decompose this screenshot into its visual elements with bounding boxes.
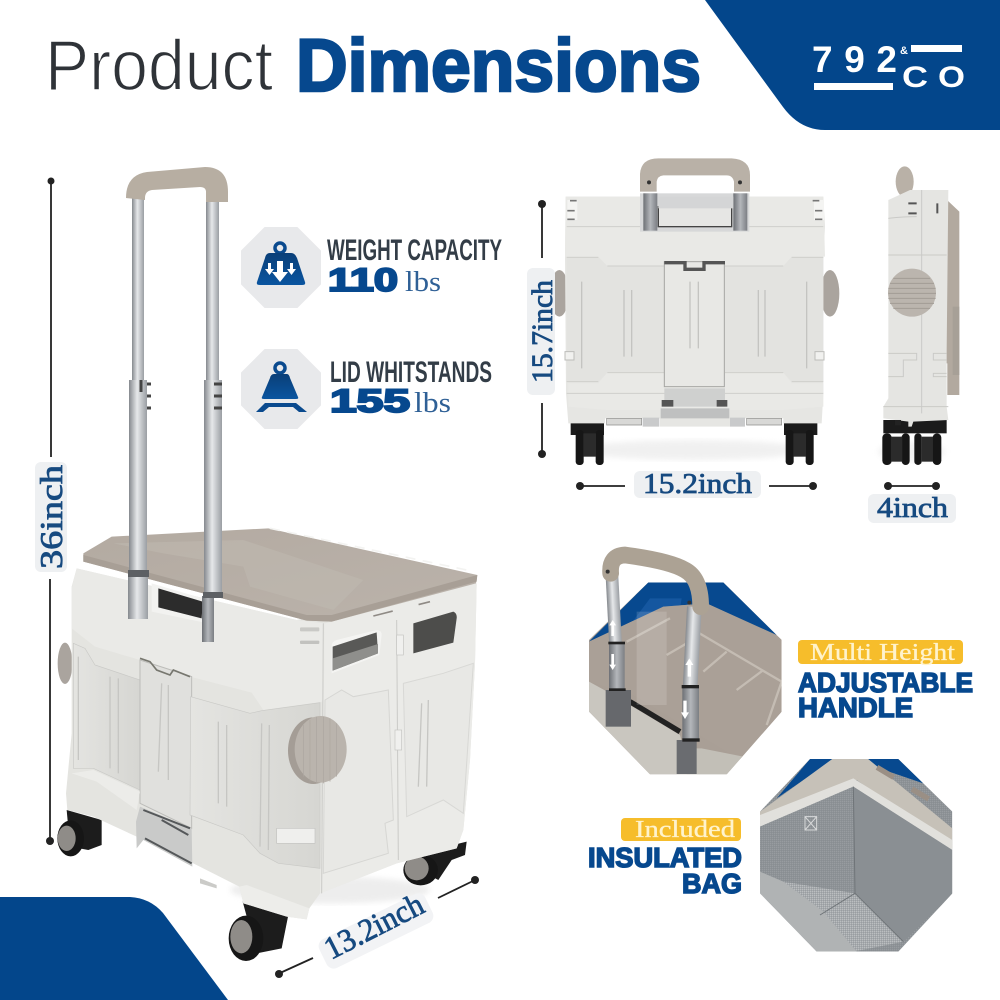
- logo: 792 & co: 792: [812, 39, 897, 80]
- callout: adjustable handle: [798, 640, 973, 723]
- bottom tray: [664, 388, 725, 407]
- handle recess: [640, 193, 749, 232]
- dimension: height 36 inch: 36inch: [33, 465, 69, 569]
- center panel: [664, 262, 724, 387]
- text: weight capacity 110 lbs: WEIGHT CAPACITY: [327, 234, 502, 267]
- bottom tray: [136, 807, 192, 867]
- body: [565, 197, 825, 427]
- handle grip: [611, 555, 701, 607]
- wheels: [571, 422, 604, 435]
- lid plate: [940, 193, 959, 395]
- panel ridges: [78, 657, 428, 850]
- side body: [883, 190, 948, 427]
- photo: insulated bag interior: [760, 753, 952, 952]
- top notches: [567, 200, 824, 220]
- callout: adjustable handle: HANDLE: [798, 692, 913, 723]
- dimension: width 15.2 inch: [576, 469, 817, 500]
- callout: insulated bag: BAG: [682, 868, 742, 899]
- lid: [83, 528, 477, 622]
- dimension: height 15.7 inch: 15.7inch: [526, 280, 559, 383]
- text: weight capacity 110 lbs: [327, 234, 502, 298]
- corner banner: top right: [705, 0, 1000, 130]
- photo: adjustable handle close-up: [589, 555, 782, 774]
- text: lid withstands 155 lbs: lbs: [414, 387, 451, 419]
- callout: insulated bag: Included: [635, 817, 735, 843]
- handle end: [896, 166, 914, 197]
- front view of cart: [550, 158, 839, 465]
- main cart with telescopic handle: [57, 167, 477, 961]
- clips: [140, 658, 190, 677]
- logo: 792 & co: &: [900, 45, 908, 57]
- logo: 792 & co: [812, 39, 965, 94]
- dimension: depth 4 inch: 4inch: [877, 492, 949, 524]
- dimension: depth 13.2 inch: 13.2inch: [318, 886, 430, 966]
- callout: adjustable handle: ADJUSTABLE: [798, 667, 973, 698]
- text: lid withstands 155 lbs: [330, 356, 492, 419]
- dimension: height 15.7 inch: [526, 200, 559, 458]
- telescopic handle: [126, 167, 228, 642]
- icon: weight capacity: [242, 228, 320, 307]
- handle grip: [640, 158, 750, 192]
- upper band: [72, 568, 325, 710]
- logo: 792 & co: C: [902, 61, 928, 94]
- side knob: [888, 269, 936, 317]
- logo: 792 & co: O: [938, 61, 965, 94]
- dimension: depth 13.2 inch: [275, 876, 479, 978]
- text: weight capacity 110 lbs: 110: [328, 262, 398, 298]
- text: lid withstands 155 lbs: LID WHITSTANDS: [330, 356, 492, 389]
- side knob: [288, 717, 339, 784]
- icon: lid withstands: [242, 350, 320, 428]
- title: Dimensions: [296, 24, 701, 107]
- body silhouette: [66, 568, 477, 919]
- front panels: [73, 643, 140, 790]
- handle tubes: [606, 573, 622, 644]
- windows: [152, 583, 208, 623]
- callout: insulated bag: [588, 817, 742, 899]
- dimension: width 15.2 inch: 15.2inch: [643, 469, 752, 500]
- dimension: depth 4 inch: [868, 482, 956, 524]
- dimension: height 36 inch: [33, 178, 69, 845]
- text: lid withstands 155 lbs: 155: [330, 383, 410, 419]
- corner banner: bottom left: [0, 897, 228, 1000]
- direction arrows: [609, 620, 693, 719]
- callout: insulated bag: INSULATED: [588, 842, 742, 873]
- side view of cart: [878, 166, 959, 465]
- title: Product: [45, 27, 273, 106]
- title: [45, 24, 701, 107]
- callout: adjustable handle: Multi Height: [810, 640, 955, 666]
- text: weight capacity 110 lbs: lbs: [405, 266, 441, 298]
- wheels: [883, 420, 947, 433]
- wheels: [67, 810, 102, 850]
- cart body, lid and wheels: [57, 528, 477, 961]
- right side face: [320, 583, 477, 893]
- lower band shading: [239, 885, 309, 919]
